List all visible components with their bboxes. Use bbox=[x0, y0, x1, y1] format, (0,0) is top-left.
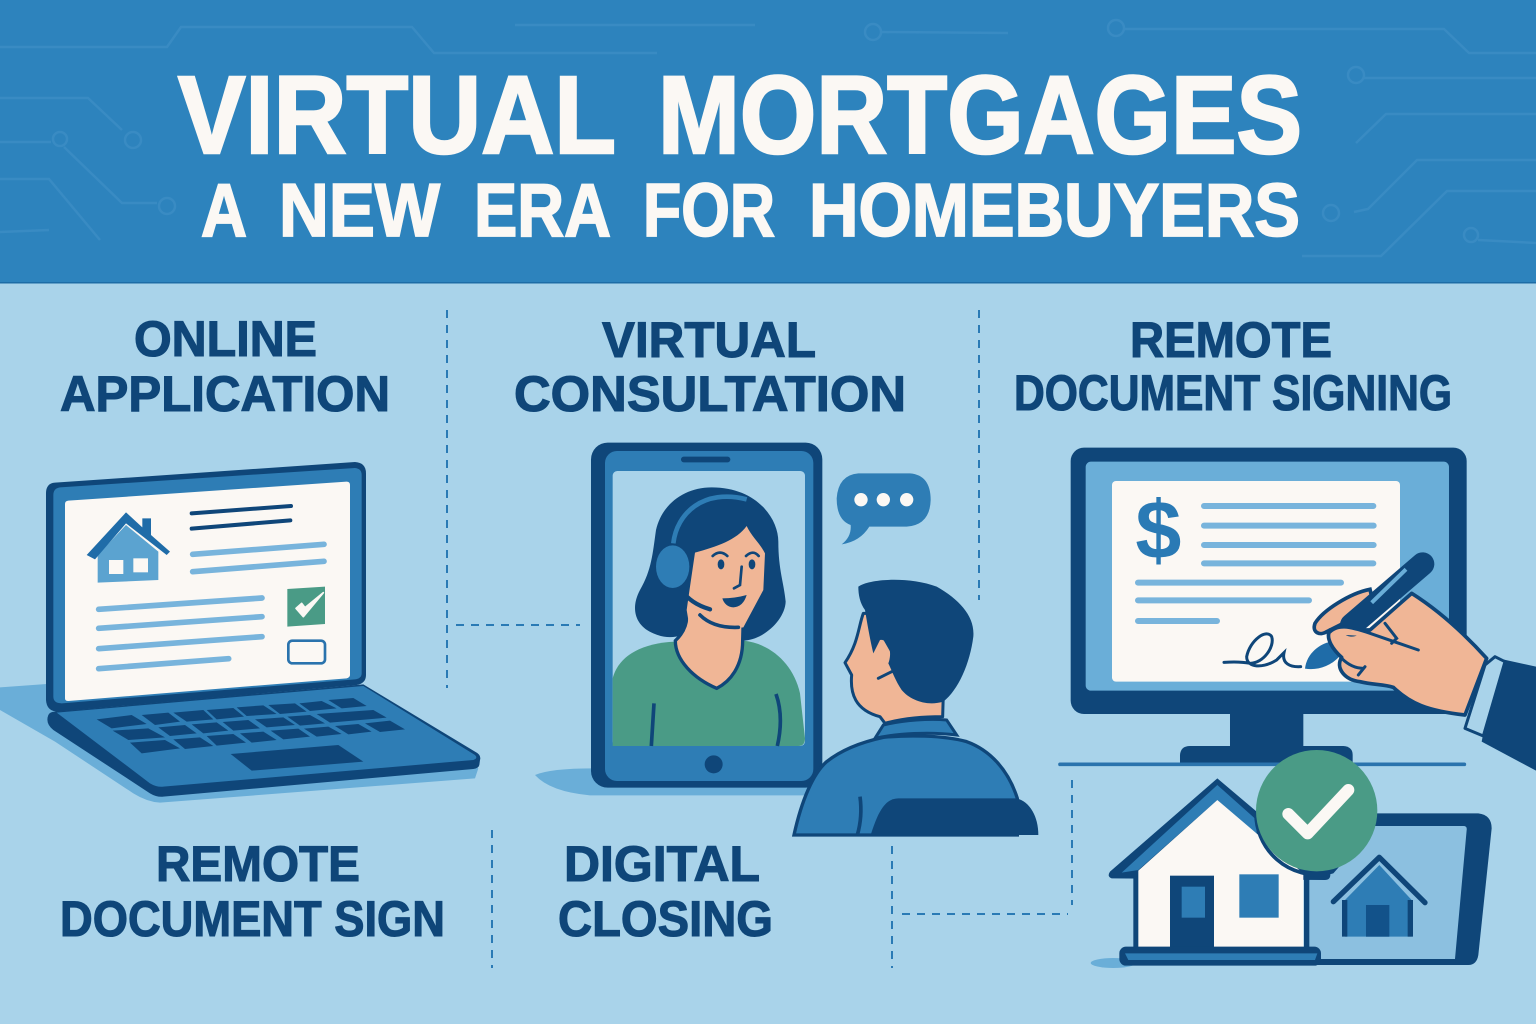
icon: house on screen bbox=[87, 512, 170, 583]
subtitle: NEW bbox=[279, 168, 440, 252]
heading: online application bbox=[60, 311, 390, 422]
main house bbox=[1109, 778, 1330, 966]
heading: remote document sign: DOCUMENT SIGN bbox=[60, 891, 445, 947]
check badge bbox=[1256, 750, 1377, 875]
heading: remote document signing: REMOTE bbox=[1130, 312, 1332, 368]
dashed dividers bbox=[447, 310, 1072, 968]
heading: online application: ONLINE bbox=[134, 311, 317, 367]
heading: remote document sign: REMOTE bbox=[156, 836, 360, 892]
header banner bbox=[0, 0, 1536, 284]
icon: speech bubble bbox=[837, 473, 931, 544]
subtitle: A bbox=[201, 168, 247, 252]
icon: laptop with application form bbox=[0, 462, 480, 803]
heading: digital closing: DIGITAL bbox=[564, 836, 760, 892]
dollar sign: $ bbox=[1135, 483, 1181, 576]
heading: virtual consultation bbox=[514, 312, 906, 422]
subtitle: ERA bbox=[474, 168, 611, 252]
title: MORTGAGES bbox=[658, 54, 1302, 177]
heading: virtual consultation: CONSULTATION bbox=[514, 366, 906, 422]
signature bbox=[1224, 634, 1301, 667]
icon: house with tablet and check badge bbox=[1091, 750, 1492, 968]
heading: digital closing: CLOSING bbox=[558, 891, 773, 947]
woman on screen bbox=[613, 487, 805, 746]
subtitle: FOR bbox=[643, 168, 775, 252]
hand holding pen bbox=[1305, 564, 1536, 771]
icon: monitor with document and signature bbox=[1060, 448, 1536, 771]
icon: tablet with video call bbox=[535, 443, 822, 795]
heading: remote document sign bbox=[60, 836, 445, 947]
subtitle bbox=[201, 168, 1300, 252]
icon: man seen from behind bbox=[794, 580, 1038, 835]
heading: virtual consultation: VIRTUAL bbox=[602, 312, 816, 368]
heading: digital closing bbox=[558, 836, 773, 947]
subtitle: HOMEBUYERS bbox=[809, 168, 1300, 252]
heading: remote document signing: DOCUMENT SIGNING bbox=[1014, 365, 1452, 421]
heading: remote document signing bbox=[1014, 312, 1452, 421]
icon: green checkbox bbox=[287, 587, 325, 627]
heading: online application: APPLICATION bbox=[60, 366, 390, 422]
back tablet bbox=[1307, 813, 1492, 965]
title bbox=[178, 54, 1302, 177]
title: VIRTUAL bbox=[178, 54, 616, 177]
